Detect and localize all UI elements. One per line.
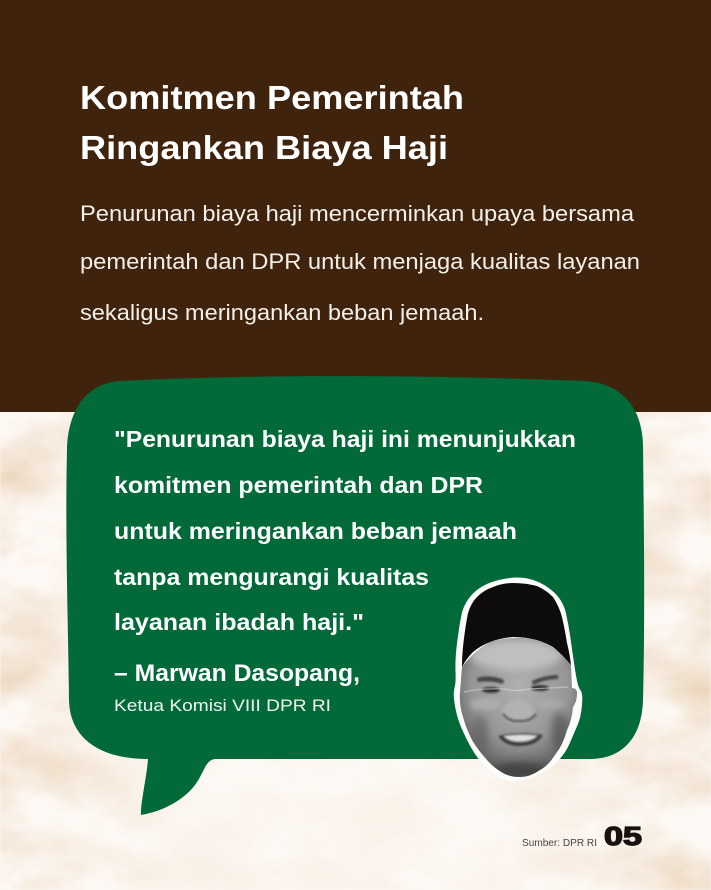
title: Komitmen Pemerintah xyxy=(80,79,464,116)
eyes xyxy=(482,687,500,693)
eyebrows xyxy=(477,676,504,684)
source label: Sumber: DPR RI xyxy=(522,837,597,849)
green speech bubble xyxy=(66,376,644,815)
quote text: tanpa mengurangi kualitas xyxy=(114,564,429,590)
quote text xyxy=(114,426,576,635)
speaker name: – Marwan Dasopang, xyxy=(114,660,360,687)
speaker role: Ketua Komisi VIII DPR RI xyxy=(114,696,331,715)
black peci hat xyxy=(462,583,571,667)
mouth and teeth xyxy=(498,733,543,746)
quote text: untuk meringankan beban jemaah xyxy=(114,518,517,544)
quote text: "Penurunan biaya haji ini menunjukkan xyxy=(114,426,576,452)
quote text: layanan ibadah haji." xyxy=(114,609,364,635)
intro paragraph xyxy=(80,201,640,325)
quote text: komitmen pemerintah dan DPR xyxy=(114,472,483,498)
brown header panel xyxy=(0,0,711,412)
paper texture background xyxy=(0,410,711,890)
intro paragraph: pemerintah dan DPR untuk menjaga kualitas layanan xyxy=(80,249,640,274)
white sticker outline xyxy=(455,579,581,780)
title: Ringankan Biaya Haji xyxy=(80,129,448,166)
nose xyxy=(503,714,536,721)
intro paragraph: sekaligus meringankan beban jemaah. xyxy=(80,300,484,325)
rimless glasses xyxy=(464,687,568,692)
page number: 05 xyxy=(604,821,642,851)
intro paragraph: Penurunan biaya haji mencerminkan upaya bersama xyxy=(80,201,635,226)
portrait: Marwan Dasopang xyxy=(455,579,585,780)
face xyxy=(460,638,577,777)
title xyxy=(80,79,464,166)
